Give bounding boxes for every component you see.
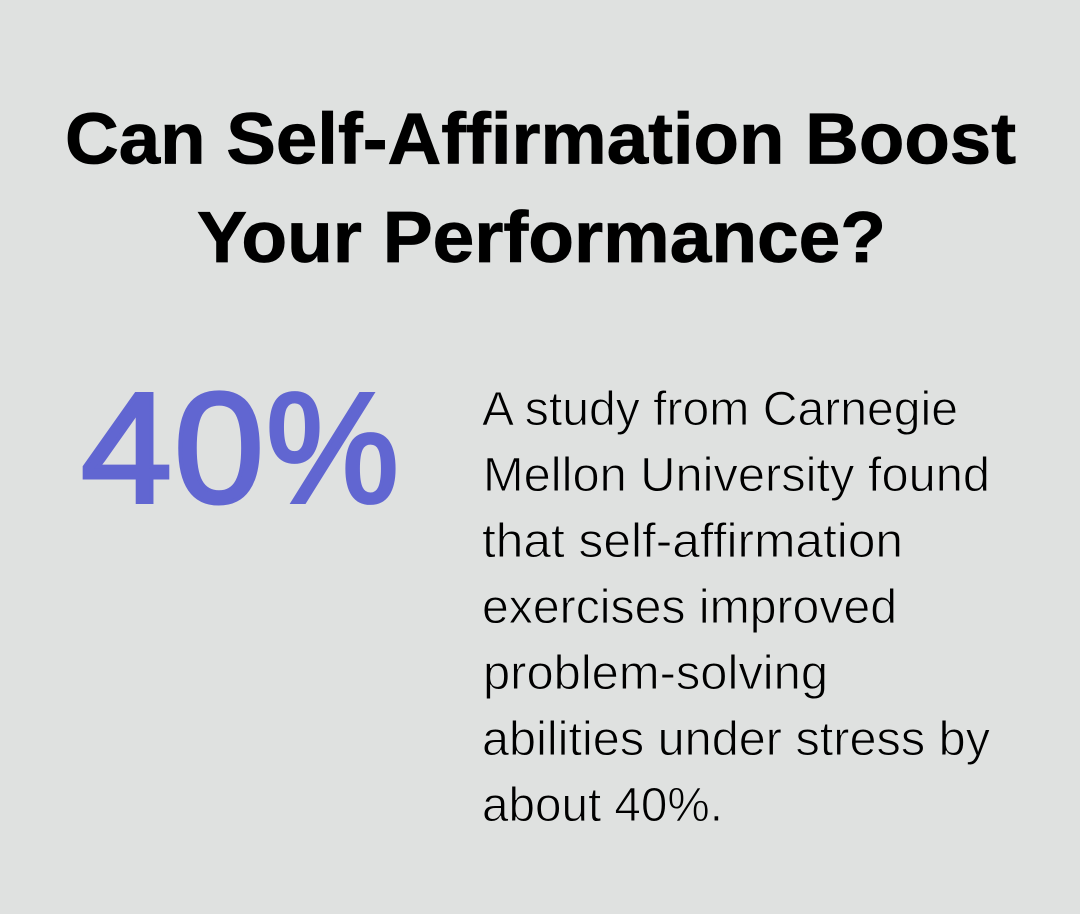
big statistic: 40%: 0 bbox=[174, 361, 264, 536]
big statistic: 40%: 4 bbox=[81, 361, 172, 536]
description text block bbox=[482, 383, 990, 832]
title: Your Performance? bbox=[197, 198, 886, 278]
big statistic: 40% bbox=[81, 361, 399, 536]
description text block: abilities under stress by bbox=[482, 713, 990, 766]
title bbox=[65, 100, 1016, 278]
title: Can Self-Affirmation Boost bbox=[65, 100, 1016, 180]
description text block: exercises improved bbox=[482, 581, 897, 634]
description text block: about 40%. bbox=[482, 779, 723, 832]
description text block: problem-solving bbox=[483, 647, 828, 700]
description text block: that self-affirmation bbox=[482, 515, 903, 568]
description text block: Mellon University found bbox=[483, 449, 990, 502]
big statistic: 40%: % bbox=[266, 361, 399, 536]
description text block: A study from Carnegie bbox=[482, 383, 958, 436]
